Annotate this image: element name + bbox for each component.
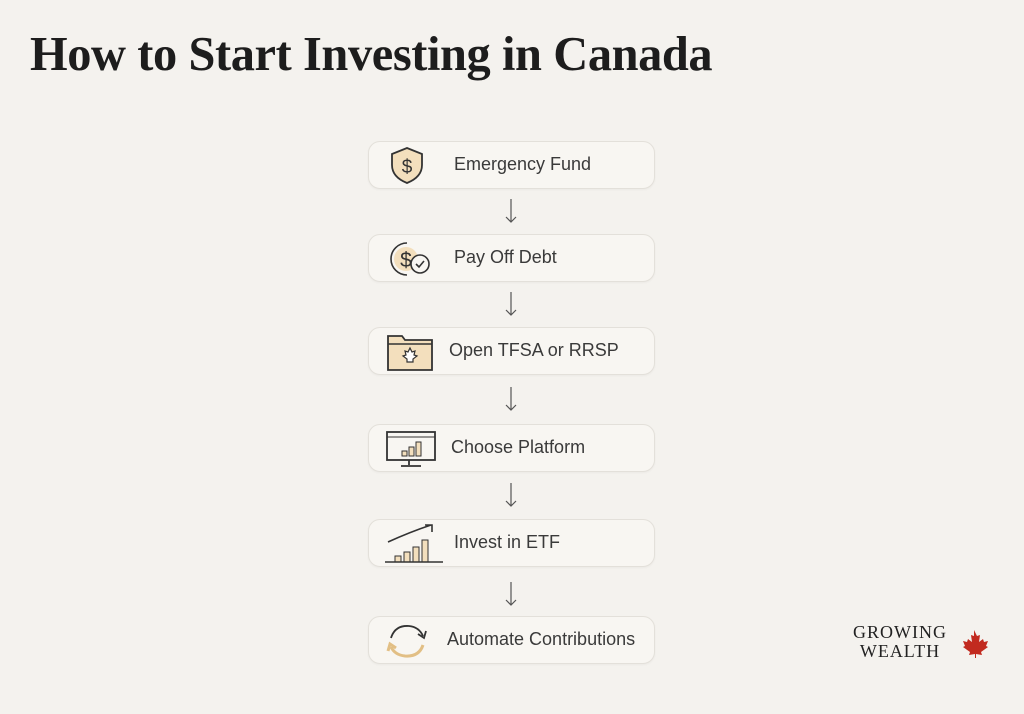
step: invest in ETF [368, 519, 655, 567]
step: invest in ETF: Invest in ETF [454, 532, 560, 552]
step: open TFSA [368, 327, 655, 375]
arrow [506, 292, 516, 316]
step: emergency fund [368, 141, 655, 189]
title: How to Start Investing in Canada [30, 28, 712, 81]
icon: shield [391, 147, 423, 184]
icon: maple leaf [963, 630, 988, 658]
step: choose platform [368, 424, 655, 472]
step: pay off debt [368, 234, 655, 282]
icon: cycle arrows [386, 625, 427, 658]
step: choose platform: Choose Platform [451, 437, 585, 457]
arrow [506, 199, 516, 223]
step: open TFSA: Open TFSA or RRSP [449, 340, 619, 360]
logo: growing wealth: GROWING [853, 622, 947, 642]
step: automate: Automate Contributions [447, 629, 635, 649]
logo: growing wealth: WEALTH [860, 641, 940, 661]
arrow [506, 483, 516, 507]
step: automate [368, 616, 655, 664]
icon: shield: $ [402, 157, 413, 178]
step: pay off debt: Pay Off Debt [454, 247, 557, 267]
icon: monitor [386, 431, 436, 467]
icon: folder maple [387, 335, 433, 371]
arrow [506, 582, 516, 606]
icon: coin check: $ [400, 249, 412, 272]
icon: growth chart [385, 524, 443, 563]
icon: coin check [390, 242, 430, 276]
step: emergency fund: Emergency Fund [454, 154, 591, 174]
logo: growing wealth [853, 622, 988, 661]
arrow [506, 387, 516, 411]
